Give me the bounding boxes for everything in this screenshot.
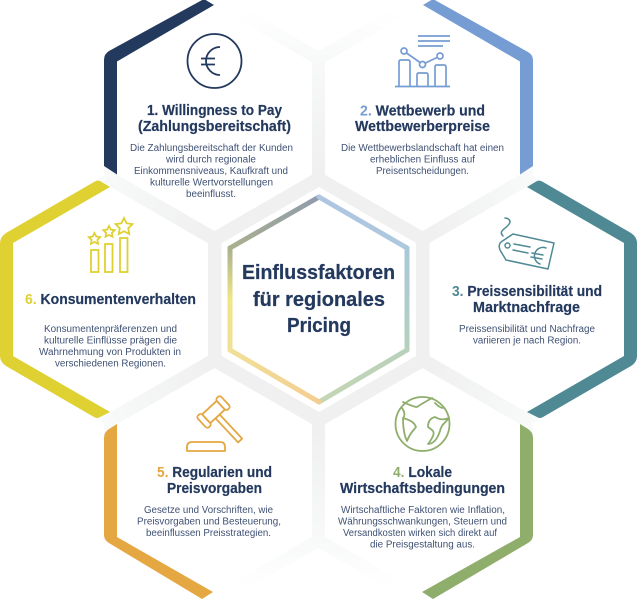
- panel: 2 Wettbewerb: [341, 0, 533, 177]
- body text: Wahrnehmung von Produkten in: [39, 347, 181, 358]
- body text: Konsumentenpräferenzen und: [44, 324, 177, 335]
- body text: [130, 143, 293, 200]
- heading: Preisvorgaben: [167, 481, 262, 497]
- body text: [459, 324, 595, 346]
- center title: für regionales: [253, 288, 385, 311]
- body text: [39, 324, 181, 370]
- heading: 3. Preissensibilität und: [452, 284, 602, 300]
- body text: beeinflusst.: [186, 189, 236, 200]
- icon: bar and line chart: [395, 36, 450, 86]
- body text: Versandkosten wirken sich direkt auf: [343, 528, 497, 539]
- panel: 4 Lokale Wirtschaftsbedingungen: [338, 397, 533, 599]
- body text: wird durch regionale: [165, 154, 256, 166]
- icon: globe: [396, 397, 450, 451]
- heading: 6. Konsumentenverhalten: [25, 292, 196, 308]
- gradient hexagon outline: [230, 197, 407, 402]
- heading: [452, 284, 602, 316]
- body text: Währungsschwankungen, Steuern und: [338, 516, 507, 528]
- accent band blue: [423, 0, 533, 174]
- body text: Preisvorgaben und Besteuerung,: [137, 516, 281, 528]
- body text: Die Wettbewerbslandschaft hat einen: [341, 143, 504, 154]
- heading: 1. Willingness to Pay: [147, 103, 282, 119]
- heading: [340, 465, 505, 497]
- accent band teal: [527, 181, 637, 418]
- panel: 1 Willingness to Pay: [104, 0, 293, 200]
- body text: kulturelle Einflüsse prägen die: [44, 336, 177, 346]
- panel: 5 Regularien: [104, 395, 281, 599]
- body text: Die Zahlungsbereitschaft der Kunden: [130, 143, 293, 154]
- center title: [242, 261, 395, 337]
- center title: Pricing: [287, 314, 351, 337]
- icon: gavel: [187, 395, 252, 451]
- body text: beeinflussen Preisstrategien.: [146, 528, 271, 539]
- heading: Wirtschaftsbedingungen: [340, 481, 505, 497]
- center title: Einflussfaktoren: [242, 261, 395, 284]
- panel: center hexagon: [230, 197, 407, 402]
- heading: [138, 103, 291, 135]
- heading: [355, 104, 490, 135]
- body text: kulturelle Wertvorstellungen: [150, 178, 273, 188]
- heading: Wettbewerberpreise: [355, 119, 490, 135]
- body text: Wirtschaftliche Faktoren wie Inflation,: [341, 505, 505, 516]
- body text: erheblichen Einfluss auf: [370, 154, 475, 166]
- body text: Preissensibilität und Nachfrage: [459, 324, 595, 335]
- icon: euro coin: [188, 34, 242, 88]
- body text: Gesetze und Vorschriften, wie: [144, 505, 273, 516]
- panel: 6 Konsumentenverhalten: [0, 181, 196, 418]
- heading: [157, 465, 272, 497]
- heading: Marktnachfrage: [473, 300, 580, 316]
- body text: [137, 505, 281, 539]
- body text: Einkommensniveaus, Kaufkraft und: [134, 166, 288, 177]
- body text: verschiedenen Regionen.: [55, 358, 166, 370]
- heading: (Zahlungsbereitschaft): [138, 119, 291, 135]
- body text: [341, 143, 504, 177]
- body text: die Preisgestaltung aus.: [370, 540, 475, 550]
- body text: [338, 505, 507, 550]
- accent band green: [422, 424, 533, 599]
- heading: 4. Lokale: [393, 465, 452, 481]
- body text: Preisentscheidungen.: [376, 166, 469, 177]
- accent band orange: [104, 424, 213, 599]
- heading: 2. Wettbewerb und: [360, 104, 485, 120]
- icon: rising bars with stars: [89, 218, 132, 272]
- heading: 5. Regularien und: [157, 465, 272, 481]
- body text: variieren je nach Region.: [473, 336, 581, 346]
- accent band yellow: [0, 181, 110, 418]
- accent band navy: [104, 0, 214, 174]
- panel: 3 Preissensibilität: [452, 181, 637, 418]
- icon: price tag: [499, 218, 554, 269]
